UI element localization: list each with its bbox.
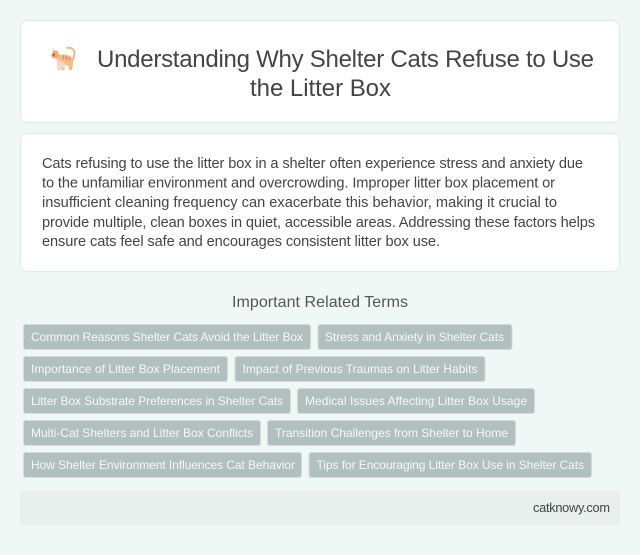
tag: Transition Challenges from Shelter to Home <box>275 426 508 440</box>
tag <box>268 420 516 446</box>
tag: How Shelter Environment Influences Cat Behavior <box>31 458 295 472</box>
tag: Stress and Anxiety in Shelter Cats <box>325 330 504 344</box>
tag <box>24 388 290 414</box>
icon: cat <box>51 48 75 70</box>
tag: Common Reasons Shelter Cats Avoid the Litter Box <box>31 330 303 344</box>
description text <box>42 156 595 250</box>
panel: description card <box>20 134 620 272</box>
tag: Importance of Litter Box Placement <box>31 362 221 376</box>
tag <box>24 420 260 446</box>
title <box>97 46 594 102</box>
description text: insufficient cleaning frequency can exacerbate this behavior, making it crucial to <box>42 195 557 211</box>
tag <box>24 452 302 478</box>
tag <box>24 356 228 382</box>
title: Understanding Why Shelter Cats Refuse to Use <box>97 46 594 73</box>
tag: Medical Issues Affecting Litter Box Usage <box>305 394 527 408</box>
description text: to the unfamiliar environment and overcrowding. Improper litter box placement or <box>42 176 555 192</box>
title: the Litter Box <box>250 75 391 102</box>
tag <box>309 452 592 478</box>
panel: title card <box>20 20 620 122</box>
description text: Cats refusing to use the litter box in a shelter often experience stress and anxiety due <box>42 156 583 172</box>
description text: ensure cats feel safe and encourages consistent litter box use. <box>42 234 440 250</box>
description text: provide multiple, clean boxes in quiet, accessible areas. Addressing these factors helps <box>42 215 595 231</box>
tag <box>24 324 310 350</box>
footer: catknowy.com <box>533 500 610 515</box>
heading: related terms: Important Related Terms <box>232 294 408 311</box>
tag <box>235 356 485 382</box>
related term tags <box>24 324 592 478</box>
footer <box>20 491 620 525</box>
tag: Impact of Previous Traumas on Litter Habits <box>242 362 478 376</box>
tag <box>318 324 512 350</box>
tag: Tips for Encouraging Litter Box Use in Shelter Cats <box>316 458 584 472</box>
tag: Multi-Cat Shelters and Litter Box Conflicts <box>31 426 253 440</box>
tag: Litter Box Substrate Preferences in Shelter Cats <box>31 394 283 408</box>
tag <box>298 388 534 414</box>
